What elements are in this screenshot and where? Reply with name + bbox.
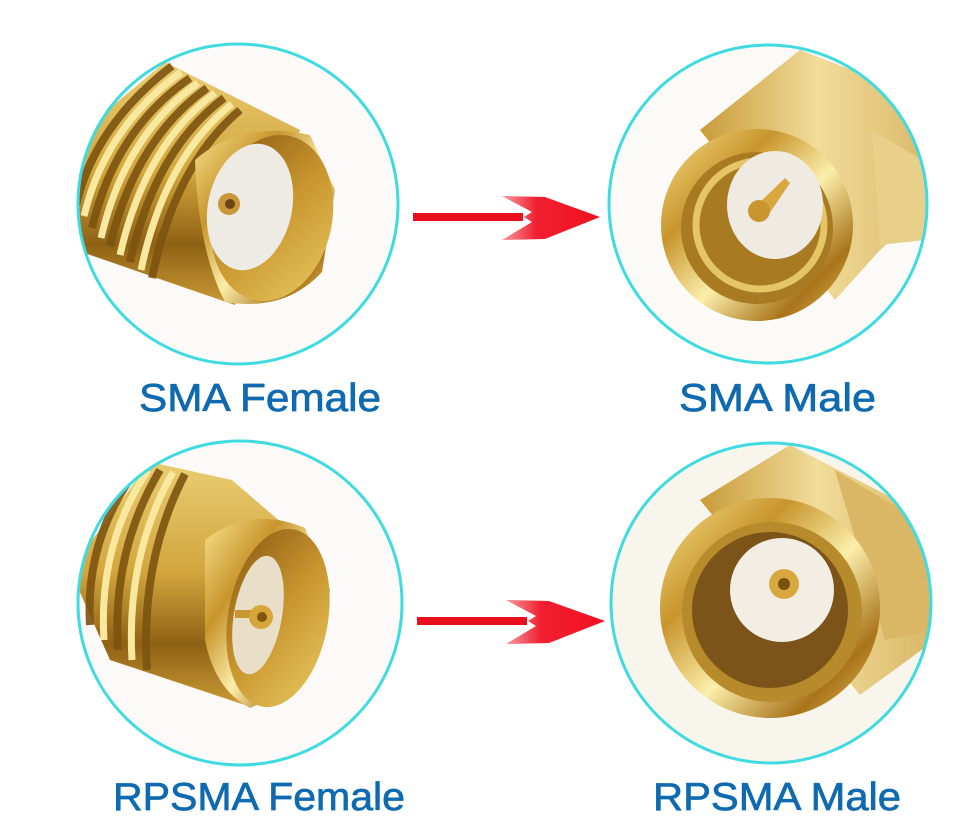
- arrow: SMA Female to Male: [413, 196, 600, 240]
- heading: SMA Male: SMA Male: [679, 377, 876, 420]
- arrow: RPSMA Female to Male: [417, 600, 605, 644]
- heading: RPSMA Female: RPSMA Female: [113, 776, 405, 819]
- panel: RPSMA Female connector: [70, 441, 402, 765]
- heading: SMA Female: SMA Female: [139, 377, 381, 420]
- panel: RPSMA Male connector: [611, 443, 935, 763]
- heading: RPSMA Male: RPSMA Male: [653, 776, 901, 819]
- panel: SMA Female connector: [60, 44, 398, 364]
- panel: SMA Male connector: [609, 45, 935, 363]
